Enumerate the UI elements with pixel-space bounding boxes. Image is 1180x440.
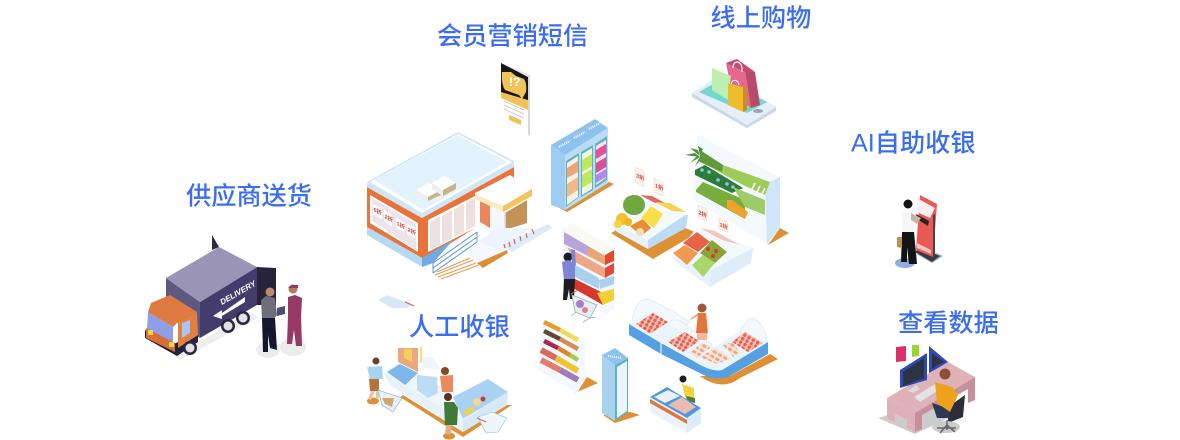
illustration: storefront building	[367, 132, 552, 279]
illustration: storefront building: 6折	[374, 205, 382, 217]
illustration: fruit display table: 3折	[636, 171, 645, 183]
illustration: vegetable wall shelf: 2折	[698, 208, 707, 220]
illustration: single fridge	[602, 348, 640, 423]
illustration: delivery truck	[145, 235, 276, 360]
illustration: chest freezer with worker	[650, 376, 701, 433]
heading: 人工收银: 人工收银	[409, 314, 510, 342]
illustration: vegetable wall shelf: 1折	[720, 220, 728, 232]
illustration: fruit display table	[610, 167, 697, 259]
illustration: marketing SMS phone card: !?	[509, 75, 520, 89]
illustration: meat counter	[629, 299, 778, 385]
illustration: delivery workers	[256, 284, 306, 358]
illustration: manual checkout counter	[367, 347, 512, 440]
heading: 会员营销短信: 会员营销短信	[437, 22, 588, 50]
illustration: fruit display table: 1折	[655, 181, 664, 193]
illustration: online shopping phone and bags	[692, 59, 776, 128]
illustration: data analyst workstation	[878, 345, 975, 434]
illustration: beverage shelf	[538, 320, 598, 393]
illustration: small shopping cart	[378, 295, 414, 308]
illustration: delivery truck: DELIVERY	[218, 279, 258, 307]
illustration: storefront building: 2折	[408, 225, 416, 237]
illustration: self checkout kiosk with customer	[895, 195, 943, 268]
illustration: snack shelf with shopper	[562, 223, 615, 322]
illustration: marketing SMS phone card	[500, 63, 530, 136]
illustration: vegetable wall shelf	[685, 134, 789, 245]
heading: AI自助收银: AI自助收银	[851, 130, 976, 158]
illustration: produce table	[672, 228, 753, 287]
heading: 供应商送货: 供应商送货	[186, 182, 312, 210]
illustration: storefront building: 1折	[396, 219, 405, 231]
illustration: triple drinks fridge	[551, 119, 614, 212]
heading: 查看数据: 查看数据	[898, 310, 999, 338]
heading: 线上购物: 线上购物	[710, 4, 811, 32]
illustration: storefront building: 2折	[384, 212, 393, 224]
